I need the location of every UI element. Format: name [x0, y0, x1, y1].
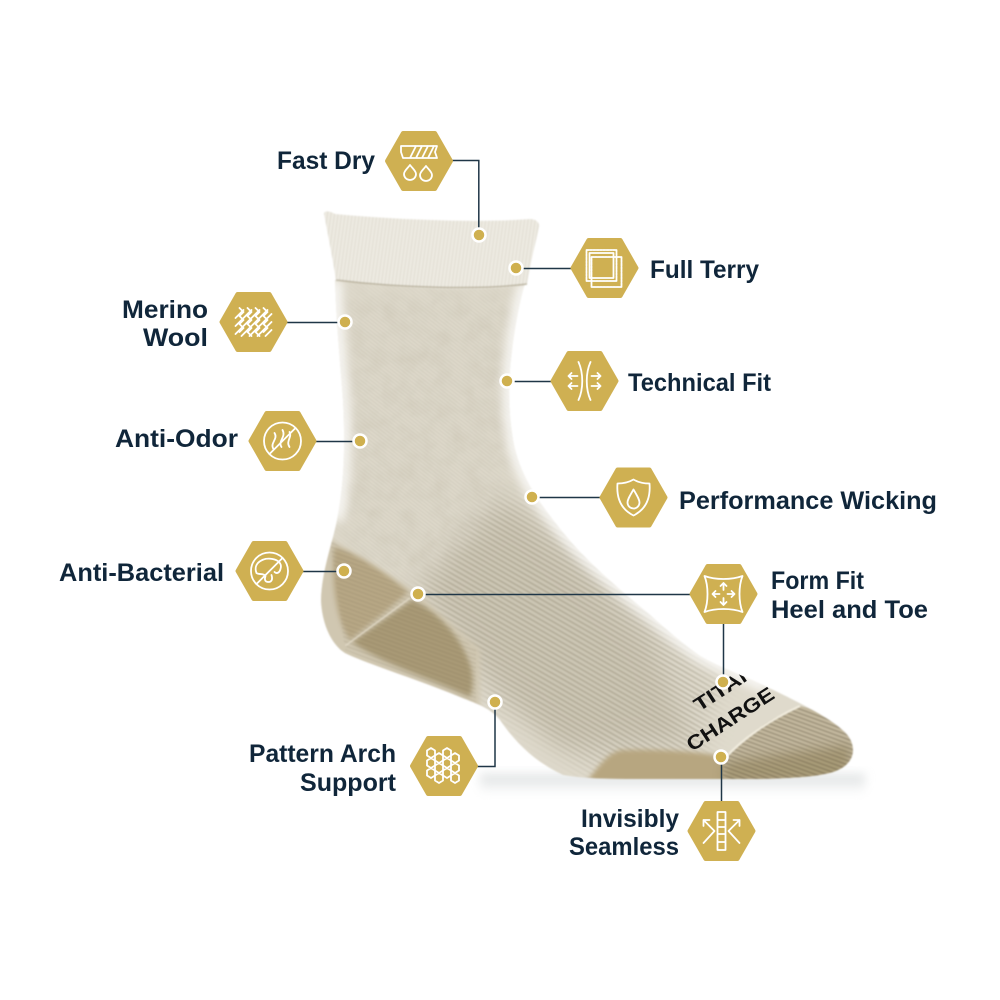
pale edge highlight — [335, 280, 767, 687]
line 2: Heel and Toe — [771, 596, 928, 624]
heel base — [312, 535, 480, 710]
icon: shield with drop — [602, 470, 666, 526]
callout: Form Fit Heel and Toe — [412, 566, 928, 688]
lower heel patch — [352, 600, 473, 697]
callout: Performance Wicking — [526, 470, 937, 526]
icon: fabric and drops — [387, 133, 451, 189]
callout: Pattern Arch Support — [249, 696, 502, 797]
icon: no odor — [250, 413, 314, 469]
line 2: Seamless — [569, 833, 679, 861]
wordmark line two: CHARGE — [683, 683, 779, 756]
wordmark line one: TITAN — [690, 660, 760, 716]
line 1: Invisibly — [581, 805, 679, 833]
connector — [511, 380, 553, 382]
label — [771, 567, 928, 624]
label: Full Terry — [650, 256, 759, 284]
ground shadow — [480, 774, 865, 794]
connector — [301, 570, 339, 572]
marker — [526, 490, 538, 504]
marker — [338, 564, 350, 578]
label — [569, 805, 679, 861]
line 2: Support — [300, 769, 397, 797]
icon: honeycomb — [412, 738, 476, 794]
marker: toe — [716, 676, 730, 688]
marker — [472, 228, 486, 242]
connector — [285, 322, 340, 324]
sock photo illustration — [312, 211, 865, 794]
label: Performance Wicking — [679, 487, 937, 515]
sole edge — [587, 747, 724, 780]
callout: Anti-Odor — [115, 413, 366, 469]
marker — [488, 696, 502, 708]
label: Technical Fit — [628, 369, 772, 397]
heel reinforcement — [333, 547, 408, 640]
icon: woven wool — [222, 294, 286, 350]
callout: Fast Dry — [277, 133, 486, 242]
connector to toe — [722, 622, 724, 678]
connector — [476, 707, 495, 766]
label: Anti-Odor — [115, 425, 238, 453]
sock leg and foot — [312, 280, 860, 785]
callout: Anti-Bacterial — [59, 543, 350, 599]
icon: no bacteria — [238, 543, 302, 599]
connector — [314, 440, 355, 442]
callout: Technical Fit — [500, 353, 772, 409]
line 1: Form Fit — [771, 567, 865, 595]
icon: terry squares — [572, 240, 636, 296]
knit on heel — [330, 540, 476, 702]
marker — [338, 316, 352, 328]
callout: Merino Wool — [122, 294, 352, 352]
marker — [500, 374, 514, 388]
icon: form fit square — [692, 566, 756, 622]
line 1: Pattern Arch — [249, 740, 396, 768]
connector to heel — [423, 594, 692, 596]
connector — [451, 160, 479, 232]
connector — [536, 496, 602, 498]
ribbing on foot — [417, 492, 722, 772]
label: Fast Dry — [277, 147, 375, 175]
marker: heel — [412, 588, 424, 600]
line 1: Merino — [122, 296, 208, 324]
label — [249, 740, 397, 797]
marker — [714, 750, 728, 764]
callout: Invisibly Seamless — [569, 750, 754, 861]
icon: seam with arrows — [690, 803, 754, 859]
sock cuff — [324, 211, 539, 289]
label — [122, 296, 208, 352]
callout: Full Terry — [510, 240, 759, 296]
label: Anti-Bacterial — [59, 559, 224, 587]
heel seam — [345, 598, 410, 646]
toe cap — [722, 706, 854, 779]
marker — [510, 262, 522, 274]
line 2: Wool — [143, 324, 208, 352]
connector — [520, 268, 573, 270]
brand wordmark on sock — [688, 674, 776, 749]
marker — [354, 434, 366, 448]
connector — [720, 762, 722, 803]
knit mottling on leg — [410, 360, 411, 361]
icon: compression curves — [552, 353, 616, 409]
shaded foot — [420, 500, 690, 750]
